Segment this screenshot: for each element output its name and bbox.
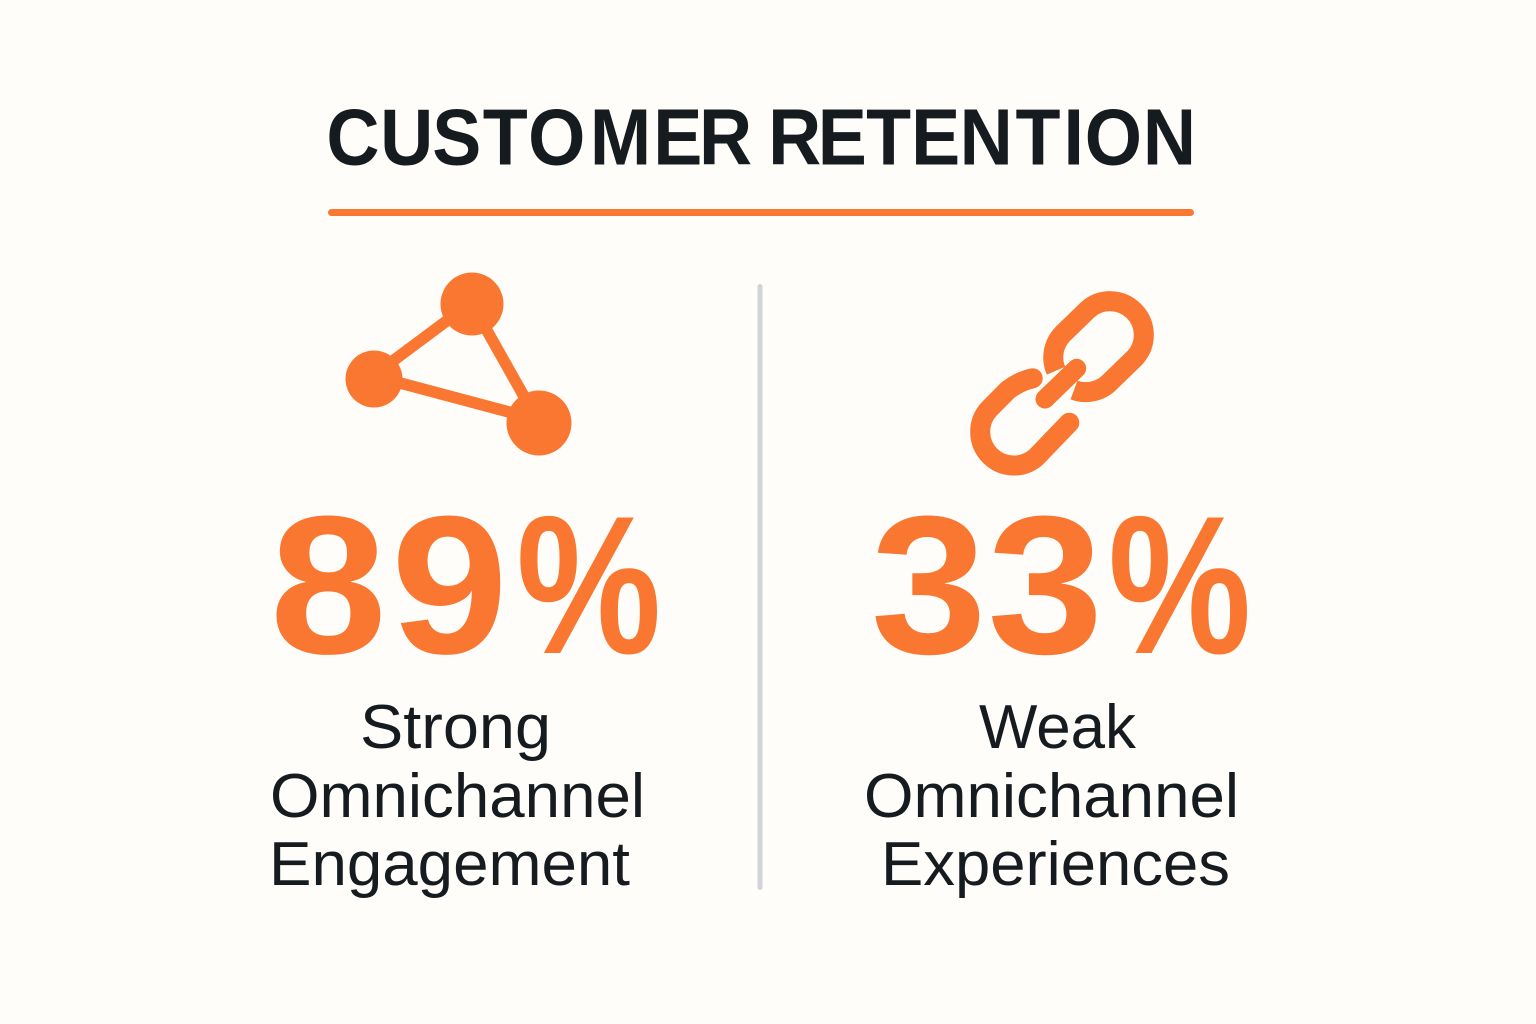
label: weak omnichannel experiences: [864, 693, 1239, 899]
label: weak omnichannel experiences: Omnichannel: [864, 762, 1239, 831]
statistic: 33%: 3: [871, 475, 987, 695]
icon: connected network nodes: [346, 272, 572, 456]
statistic: 33%: [871, 475, 1251, 695]
statistic: 89%: [270, 475, 661, 695]
panel: weak omnichannel experiences: [864, 301, 1251, 899]
label: strong omnichannel engagement: [269, 693, 645, 899]
panel: strong omnichannel engagement: [269, 272, 661, 899]
statistic: 89%: 9: [391, 475, 508, 695]
title underline: [328, 209, 1194, 216]
label: weak omnichannel experiences: Weak: [979, 693, 1137, 762]
icon: broken chain link: [980, 301, 1144, 466]
label: strong omnichannel engagement: Omnichannel: [270, 762, 645, 831]
centre divider: [758, 284, 762, 890]
statistic: 33%: 3: [987, 475, 1103, 695]
label: strong omnichannel engagement: Strong: [360, 693, 551, 762]
statistic: 89%: %: [516, 475, 661, 695]
title: CUSTOMER RETENTION: [326, 93, 1196, 182]
statistic: 89%: 8: [270, 475, 387, 695]
label: weak omnichannel experiences: Experiences: [881, 830, 1230, 899]
label: strong omnichannel engagement: Engagement: [269, 830, 630, 899]
header: [326, 93, 1196, 216]
statistic: 33%: %: [1108, 475, 1251, 695]
